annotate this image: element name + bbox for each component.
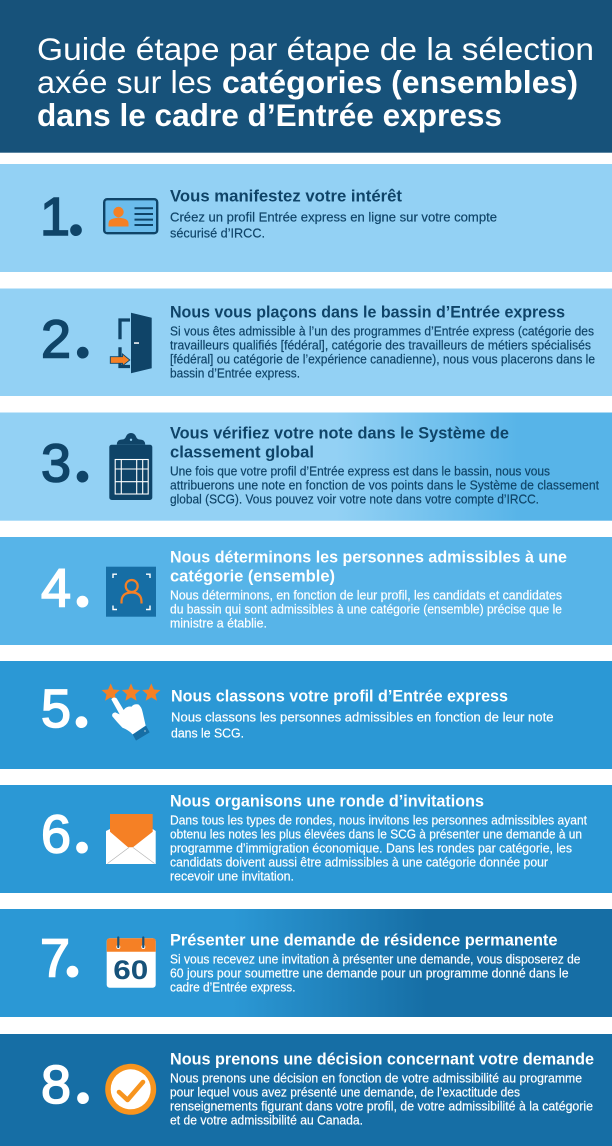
body text: candidats doivent aussi être admissibles à une catégorie donnée pour xyxy=(170,856,548,870)
panel: step 5 xyxy=(0,661,612,769)
body text xyxy=(170,211,497,241)
panel: step 2 xyxy=(0,288,612,396)
body text: Si vous êtes admissible à l’un des programmes d’Entrée express (catégorie des xyxy=(170,325,594,339)
title: dans le cadre d’Entrée express xyxy=(37,97,502,133)
body text: programme d’immigration économique. Dans les rondes par catégorie, les xyxy=(170,842,572,856)
body text: Créez un profil Entrée express en ligne sur votre compte xyxy=(170,211,497,225)
body text xyxy=(170,814,588,884)
body text: global (SCG). Vous pouvez voir votre note dans votre compte d’IRCC. xyxy=(170,493,539,507)
icon: identity card xyxy=(104,199,157,233)
body text: cadre d’Entrée express. xyxy=(170,981,296,995)
icon: clipboard with table xyxy=(109,433,152,500)
body text: obtenu les notes les plus élevées dans le SCG à présenter une demande à un xyxy=(170,828,582,842)
number 2: . xyxy=(74,294,92,374)
number 4: 4 xyxy=(41,559,71,619)
body text: 60 jours pour soumettre une demande pour un programme donné dans le xyxy=(170,967,569,981)
body text xyxy=(170,465,600,507)
panel: step 7 xyxy=(0,909,612,1017)
body text: et de votre admissibilité au Canada. xyxy=(170,1114,363,1128)
body text: Nous classons les personnes admissibles en fonction de leur note xyxy=(171,711,554,725)
number 1: . xyxy=(67,171,85,251)
title: axée sur les xyxy=(37,64,212,100)
panel: step 8 xyxy=(0,1034,612,1146)
heading: classement global xyxy=(170,443,314,462)
body text: Nous prenons une décision en fonction de votre admissibilité au programme xyxy=(170,1072,582,1086)
icon: hand clicking stars xyxy=(102,683,160,741)
body text: pour lequel vous avez présenté une demande, de l’exactitude des xyxy=(170,1086,520,1100)
body text xyxy=(170,1072,593,1128)
icon: door with arrow xyxy=(110,313,152,373)
number 2: 2 xyxy=(41,310,71,370)
header banner xyxy=(0,0,612,153)
heading: Nous vous plaçons dans le bassin d’Entrée express xyxy=(170,303,565,322)
number 7: 7 xyxy=(40,929,70,989)
body text: attribuerons une note en fonction de vos points dans le Système de classement xyxy=(170,479,600,493)
heading xyxy=(170,424,509,462)
body text: Une fois que votre profil d’Entrée express est dans le bassin, nous vous xyxy=(170,465,550,479)
icon: person in frame xyxy=(106,567,156,617)
number 1: 1 xyxy=(40,187,70,247)
number 7: . xyxy=(64,913,82,993)
heading: Nous classons votre profil d’Entrée express xyxy=(171,687,508,706)
number 6: 6 xyxy=(41,805,71,865)
heading: Nous déterminons les personnes admissibles à une xyxy=(170,548,567,567)
body text xyxy=(170,953,581,995)
number 5: . xyxy=(72,663,90,743)
number 8: . xyxy=(74,1039,92,1119)
body text: bassin d’Entrée express. xyxy=(170,367,300,381)
heading: Nous organisons une ronde d’invitations xyxy=(170,792,484,811)
body text xyxy=(170,589,562,631)
number 3: . xyxy=(74,418,92,498)
panel: step 4 xyxy=(0,537,612,645)
heading: catégorie (ensemble) xyxy=(170,567,335,586)
icon: calendar showing 60 xyxy=(107,938,156,988)
number 5: 5 xyxy=(41,679,71,739)
icon: check mark badge xyxy=(105,1064,156,1115)
heading: Vous manifestez votre intérêt xyxy=(170,187,402,206)
heading: Vous vérifiez votre note dans le Système de xyxy=(170,424,509,443)
heading: Nous prenons une décision concernant votre demande xyxy=(170,1050,594,1069)
panel: step 3 xyxy=(0,412,612,521)
body text xyxy=(170,325,595,381)
heading: Présenter une demande de résidence permanente xyxy=(170,931,558,950)
body text: travailleurs qualifiés [fédéral], catégorie des travailleurs de métiers spécialisés xyxy=(170,339,591,353)
number 4: . xyxy=(74,543,92,623)
heading xyxy=(170,548,567,586)
panel: step 6 xyxy=(0,785,612,893)
body text: Nous déterminons, en fonction de leur profil, les candidats et candidates xyxy=(170,589,562,603)
body text: [fédéral] ou catégorie de l’expérience canadienne), nous vous placerons dans le xyxy=(170,353,595,367)
number 8: 8 xyxy=(41,1055,71,1115)
body text: du bassin qui sont admissibles à une catégorie (ensemble) précise que le xyxy=(170,603,562,617)
body text: Dans tous les types de rondes, nous invitons les personnes admissibles ayant xyxy=(170,814,588,828)
icon: envelope xyxy=(106,814,156,864)
body text: ministre a établie. xyxy=(170,617,267,631)
panel: step 1 xyxy=(0,164,612,272)
icon: calendar showing 60: 60 xyxy=(113,955,148,985)
body text xyxy=(171,711,554,740)
body text: recevoir une invitation. xyxy=(170,870,294,884)
number 6: . xyxy=(73,789,91,869)
body text: renseignements figurant dans votre profil, de votre admissibilité à la catégorie xyxy=(170,1100,593,1114)
body text: Si vous recevez une invitation à présenter une demande, vous disposerez de xyxy=(170,953,581,967)
body text: dans le SCG. xyxy=(171,726,244,740)
title xyxy=(37,31,594,133)
title: catégories (ensembles) xyxy=(222,64,578,100)
body text: sécurisé d’IRCC. xyxy=(170,227,265,241)
title: Guide étape par étape de la sélection xyxy=(37,31,594,67)
number 3: 3 xyxy=(41,434,71,494)
